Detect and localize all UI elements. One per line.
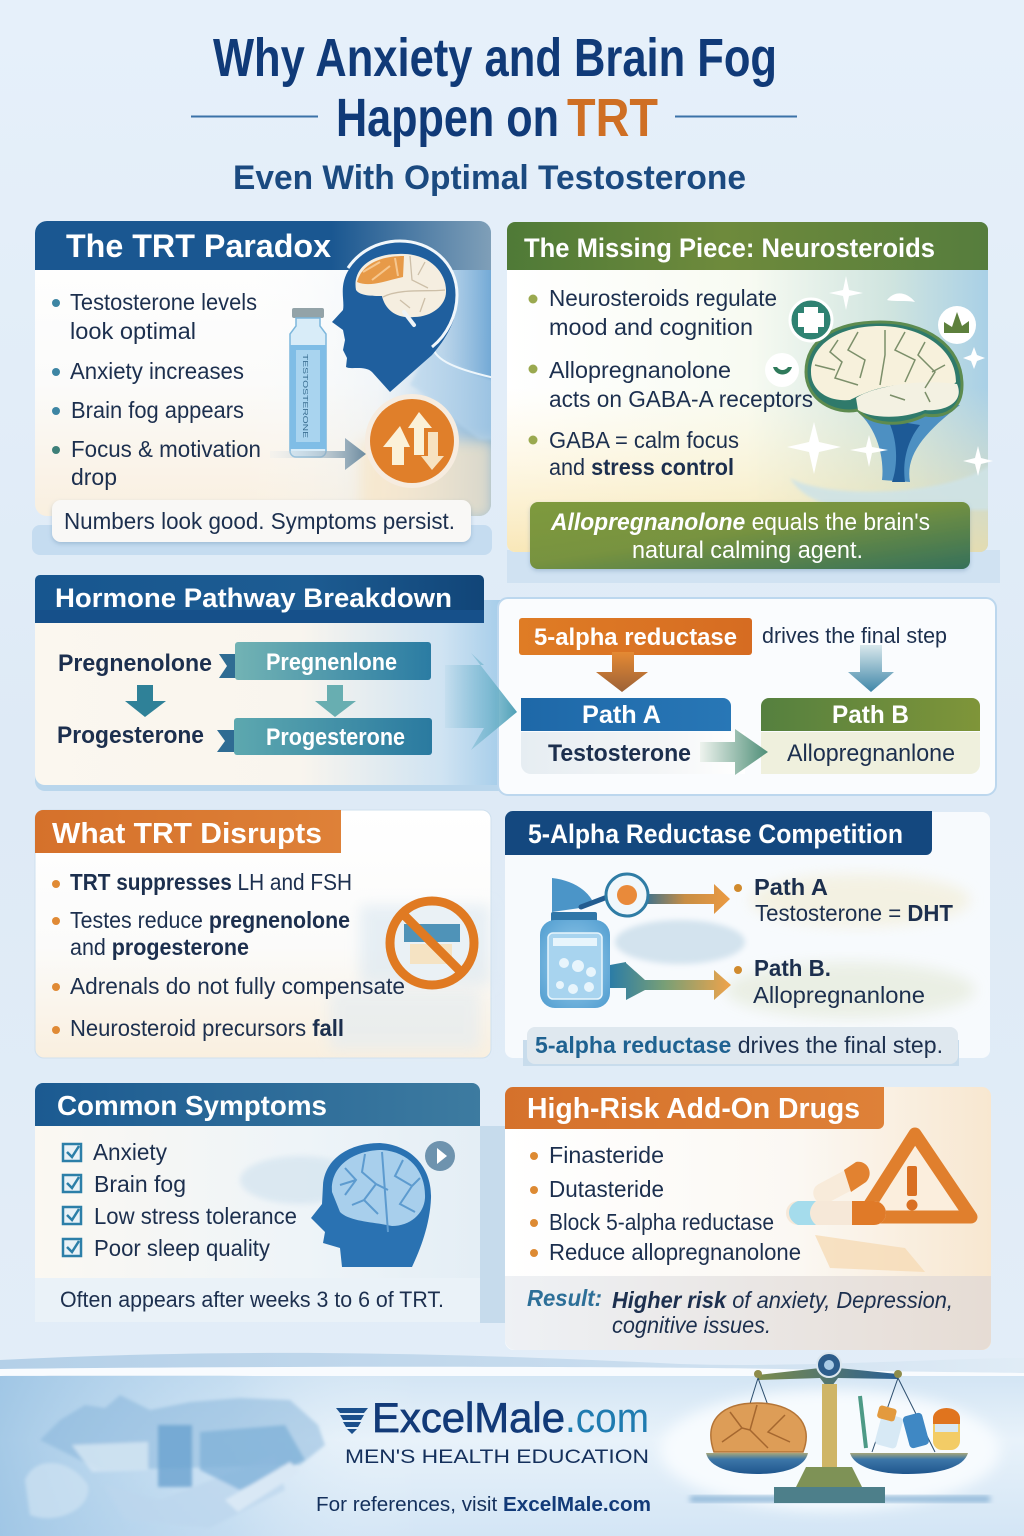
title: Happen on <box>336 88 559 148</box>
heading: The Missing Piece: The Missing Piece: Neurosteroids <box>524 233 935 263</box>
title: TRT <box>567 88 658 148</box>
bullet list: neurosteroids: GABA = calm focus <box>549 427 739 453</box>
title: Why Anxiety and Brain Fog <box>213 28 777 88</box>
icon: head with blue brain <box>311 1141 455 1267</box>
box: Path A <box>521 698 745 774</box>
bullet list: disruptions continued: Neurosteroid precursors fall <box>70 1015 344 1041</box>
arrow: teal down <box>848 645 894 692</box>
icon: smile badge <box>765 353 799 387</box>
text: Path A <box>734 874 953 926</box>
icon: leaf badge <box>938 306 976 344</box>
row: Progesterone: Progesterone <box>266 724 405 751</box>
box: Path B <box>761 698 980 774</box>
icon: vial <box>290 308 326 457</box>
bullet list: paradox symptoms: Anxiety increases <box>70 358 244 384</box>
callout: natural calming agent: natural calming agent. <box>632 537 863 564</box>
checklist: symptoms: Poor sleep quality <box>94 1235 270 1261</box>
heading: Hormone Pathway: Hormone Pathway Breakdown <box>55 583 452 613</box>
bullet list: risky drugs: Block 5-alpha reductase <box>549 1209 774 1235</box>
callout: numbers look good <box>52 500 471 542</box>
box: Path A: Path A <box>582 701 661 729</box>
bullet list: paradox symptoms: Focus & motivation <box>71 436 261 462</box>
panel: Common Symptoms <box>35 1083 505 1323</box>
arrow: large pathway arrow <box>445 653 517 750</box>
panel: 5-Alpha Reductase Competition <box>505 811 990 1066</box>
icon: head with brain <box>332 240 458 392</box>
bullet list: risky drugs: Dutasteride <box>549 1176 664 1202</box>
box: Path B: Allopregnanlone <box>787 740 955 767</box>
text: result: Higher risk of anxiety, Depression, <box>612 1287 953 1313</box>
heading: What TRT Disrupts <box>35 810 341 853</box>
box: Path B: Path B <box>832 701 909 729</box>
footer band <box>0 1353 1024 1536</box>
icon: prohibition sign <box>360 901 490 985</box>
bullet list: neurosteroids: Neurosteroids regulate <box>549 285 777 311</box>
bullet list: paradox symptoms: drop <box>71 464 117 490</box>
icon: up down arrows badge <box>365 394 459 488</box>
heading: What TRT Disrupts: What TRT Disrupts <box>52 818 322 850</box>
text: result: Result: <box>527 1285 602 1311</box>
bullet list: disruptions: Testes reduce pregnenolone <box>70 907 350 933</box>
panel: The TRT Paradox <box>32 221 495 555</box>
arrow: green right <box>700 729 768 775</box>
panel: High-Risk Add-On Drugs <box>505 1087 991 1350</box>
bullet list: risky drugs <box>530 1142 801 1265</box>
text: Path B: Allopregnanlone <box>753 982 925 1008</box>
bullet list: paradox symptoms: look optimal <box>70 318 196 344</box>
logo: ExcelMale.com: ExcelMale <box>372 1394 565 1441</box>
panel: The Missing Piece <box>507 222 1000 583</box>
bullet list: disruptions continued: Adrenals do not fully compensate <box>70 973 405 999</box>
row: Pregnenolone: Pregnenlone <box>266 649 397 676</box>
checklist: symptoms: Anxiety <box>93 1139 167 1165</box>
icon: glowing brain <box>787 276 993 482</box>
icon: warning triangle <box>815 1134 971 1272</box>
row: Pregnenolone <box>58 642 431 680</box>
heading: Common Symptoms <box>35 1083 480 1126</box>
callout: numbers look good: Numbers look good. Symptoms persist. <box>64 508 455 534</box>
arrow: down right <box>315 685 356 717</box>
box: Path A: Testosterone <box>548 740 691 767</box>
text: result <box>527 1285 953 1338</box>
bullet list: neurosteroids: mood and cognition <box>549 314 753 340</box>
heading: The Missing Piece <box>507 222 988 270</box>
panel: What TRT Disrupts <box>35 810 491 1058</box>
checklist: symptoms <box>63 1139 297 1261</box>
heading: The TRT Paradox: The TRT Paradox <box>66 228 331 264</box>
icon: pills <box>786 1162 886 1225</box>
heading: High-Risk Add-On Drugs <box>505 1087 884 1129</box>
icon: vial: TESTOSTERONE <box>301 354 308 438</box>
title <box>191 28 797 148</box>
bullet list: paradox symptoms <box>52 289 261 490</box>
text: drives the final step: drives the final step <box>762 623 947 648</box>
footnote: weeks 3 to 6: Often appears after weeks 3 to 6 of TRT. <box>60 1287 444 1312</box>
heading: High-Risk Add-On Drugs: High-Risk Add-On Drugs <box>527 1093 860 1125</box>
icon: spray bottle <box>540 878 610 1008</box>
text: result: cognitive issues. <box>612 1312 771 1338</box>
callout: drives the final step <box>523 1027 959 1066</box>
callout: natural calming agent <box>530 502 970 569</box>
bullet list: paradox symptoms: Brain fog appears <box>71 397 244 423</box>
logo: ExcelMale.com <box>336 1394 649 1441</box>
bullet list: neurosteroids: and stress control <box>549 454 734 480</box>
bullet list: disruptions <box>52 869 352 960</box>
panel: enzyme paths <box>498 598 996 795</box>
heading: Common Symptoms: Common Symptoms <box>57 1090 327 1121</box>
text: Path A: Path A <box>754 874 828 900</box>
illustration: balance scale <box>660 1353 1000 1510</box>
heading: 5-Alpha Reductase Competition <box>505 811 932 855</box>
logo: ExcelMale.com: .com <box>565 1394 649 1441</box>
row: Progesterone: Progesterone <box>57 722 204 749</box>
checklist: symptoms: Brain fog <box>94 1171 186 1197</box>
subtitle: Even With Optimal Testosterone <box>233 159 746 197</box>
bullet list: disruptions: and progesterone <box>70 934 249 960</box>
heading: 5-Alpha Reductase Competition: 5-Alpha Reductase Competition <box>528 819 903 849</box>
arrow: Path B arrow <box>610 962 731 1000</box>
icon: plus badge <box>790 299 832 341</box>
bullet list: neurosteroids: Allopregnanolone <box>549 357 731 383</box>
row: Pregnenolone: Pregnenolone <box>58 650 212 677</box>
arrow: orange down <box>596 652 648 692</box>
callout: natural calming agent: Allopregnanolone equals the brain's <box>550 509 930 536</box>
checklist: symptoms: Low stress tolerance <box>94 1203 297 1229</box>
bullet list: disruptions: TRT suppresses LH and FSH <box>70 869 352 895</box>
bullet list: risky drugs: Finasteride <box>549 1142 664 1168</box>
icon: scale pans <box>706 1453 968 1474</box>
label: 5-alpha reductase <box>519 618 752 655</box>
row: Progesterone <box>57 718 432 755</box>
illustration: medical campus <box>25 1395 325 1528</box>
arrow: down left <box>125 685 166 717</box>
bullet list: disruptions continued <box>52 973 405 1041</box>
label: 5-alpha reductase: 5-alpha reductase <box>534 624 737 651</box>
bullet list: neurosteroids: acts on GABA-A receptors <box>549 386 813 412</box>
arrow: Path A arrow <box>606 874 730 916</box>
text: Path B <box>734 955 925 1008</box>
icon: medicines on pan <box>860 1396 960 1450</box>
bullet list: neurosteroids <box>528 285 813 480</box>
bullet list: risky drugs: Reduce allopregnanolone <box>549 1239 801 1265</box>
text: Path B: Path B. <box>754 955 831 981</box>
text: Path A: Testosterone = DHT <box>755 900 953 926</box>
bullet list: paradox symptoms: Testosterone levels <box>70 289 257 315</box>
icon: brain on pan <box>711 1403 806 1452</box>
callout: drives the final step: 5-alpha reductase drives the final step. <box>535 1032 943 1058</box>
footer reference: For references, visit ExcelMale.com <box>316 1493 651 1516</box>
arrow: vial to hormone icon <box>270 438 366 470</box>
panel: Hormone Pathway Breakdown <box>35 575 525 791</box>
heading: Hormone Pathway <box>35 575 484 623</box>
tagline: MEN'S HEALTH EDUCATION <box>345 1447 649 1468</box>
heading: The TRT Paradox <box>35 221 491 270</box>
